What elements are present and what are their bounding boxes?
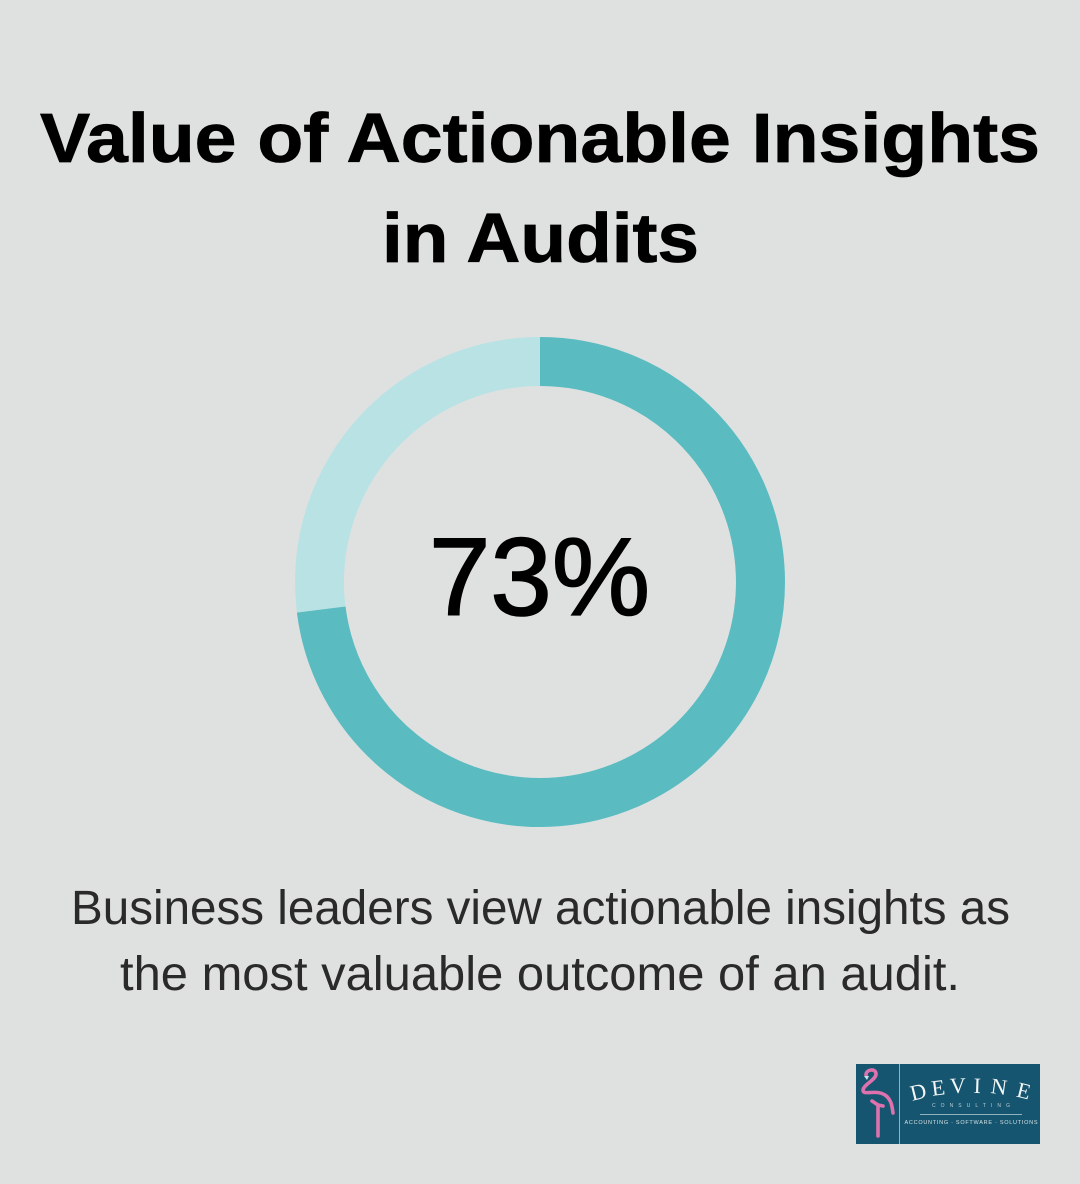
- logo wordmark: E: [930, 1074, 946, 1101]
- center value: 73%: [429, 516, 650, 639]
- icon: flamingo beak: [864, 1076, 869, 1080]
- title: Value of Actionable Insights: [40, 99, 1040, 177]
- logo: Devine Consulting: [856, 1064, 1040, 1144]
- logo subtitle: [904, 1103, 1038, 1126]
- logo subtitle: CONSULTING: [932, 1103, 1010, 1109]
- donut track: [320, 362, 760, 802]
- description: the most valuable outcome of an audit.: [120, 948, 960, 1001]
- logo wordmark: [907, 1073, 1033, 1106]
- icon: flamingo: [863, 1070, 893, 1136]
- title: in Audits: [382, 199, 699, 277]
- logo wordmark: V: [949, 1073, 966, 1098]
- description: [71, 882, 1010, 1001]
- logo wordmark: E: [1014, 1077, 1033, 1104]
- donut chart: 73%: [320, 362, 760, 802]
- logo rule: [920, 1114, 1022, 1115]
- logo divider: [899, 1064, 900, 1144]
- logo wordmark: I: [973, 1073, 981, 1098]
- title: [40, 99, 1040, 277]
- logo subtitle: ACCOUNTING · SOFTWARE · SOLUTIONS: [904, 1120, 1038, 1126]
- logo wordmark: D: [907, 1078, 929, 1106]
- donut value arc: [321, 362, 760, 802]
- logo wordmark: N: [989, 1073, 1009, 1100]
- description: Business leaders view actionable insights as: [71, 882, 1010, 935]
